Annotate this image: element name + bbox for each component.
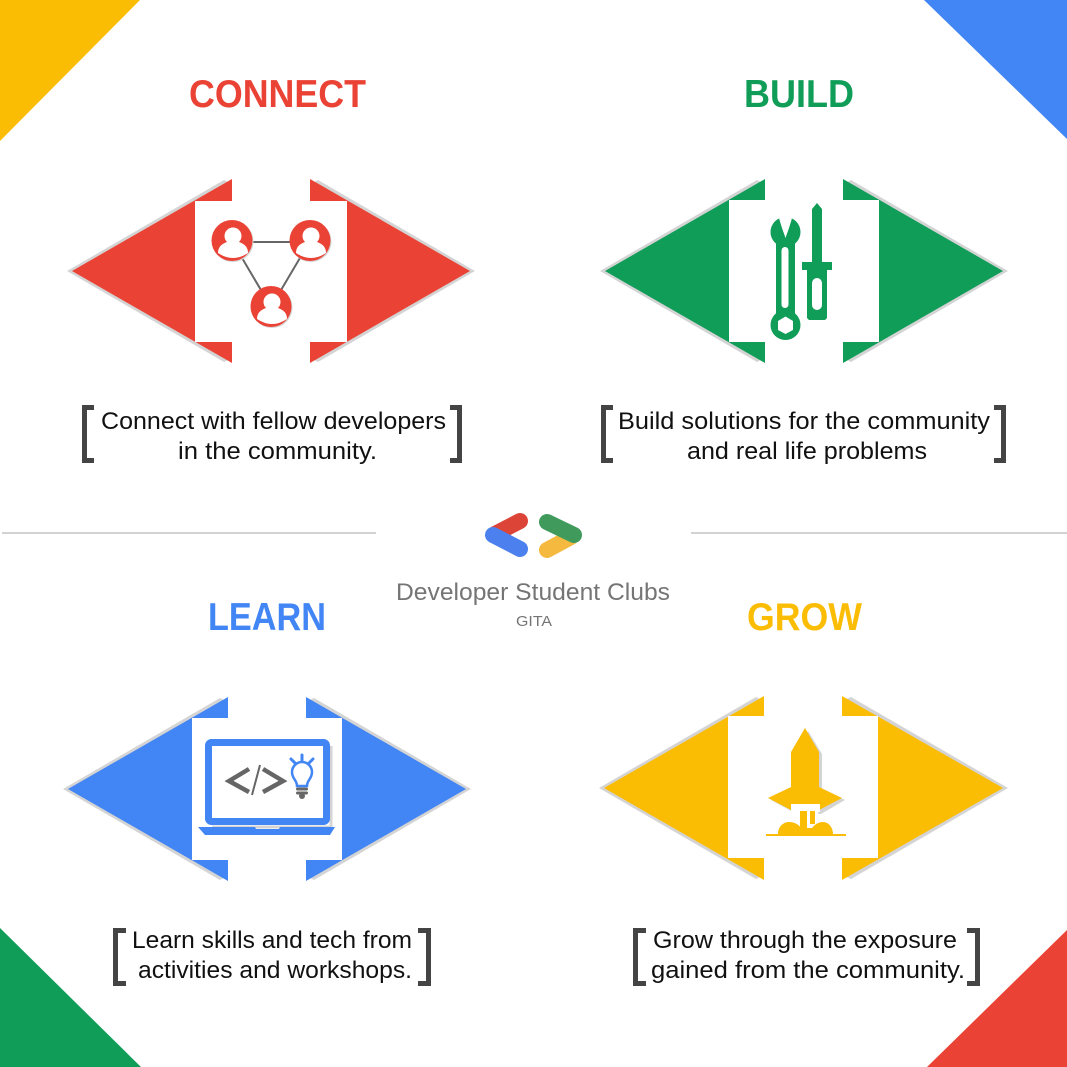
panel: connect	[67, 73, 475, 465]
corner: blue	[924, 0, 1067, 139]
diamond: learn	[63, 697, 471, 881]
icon: wrench and screwdriver	[770, 203, 832, 340]
logo: developer student clubs	[396, 521, 670, 630]
text block: grow: Grow through the exposure	[653, 927, 957, 954]
text block: build	[604, 408, 1004, 465]
diamond: build	[600, 179, 1008, 363]
logo mark	[493, 521, 574, 550]
heading: connect: CONNECT	[189, 73, 366, 116]
text block: connect: Connect with fellow developers	[101, 408, 446, 435]
text block: build: Build solutions for the community	[618, 408, 990, 435]
heading: build: BUILD	[744, 73, 854, 116]
diamond: grow	[599, 696, 1008, 880]
text block: grow: gained from the community.	[651, 957, 965, 984]
text block: connect: in the community.	[178, 438, 377, 465]
text block: learn: activities and workshops.	[138, 957, 412, 984]
text block: grow	[636, 927, 978, 984]
panel: grow	[599, 596, 1008, 984]
text block: build: and real life problems	[687, 438, 927, 465]
heading: learn: LEARN	[208, 596, 326, 639]
panel: build	[600, 73, 1008, 465]
text block: learn: Learn skills and tech from	[132, 927, 412, 954]
heading: grow: GROW	[747, 596, 862, 639]
icon: rocket	[766, 728, 846, 836]
logo chapter name: GITA	[516, 613, 552, 630]
diamond: connect	[67, 179, 475, 363]
corner: green	[0, 928, 141, 1067]
icon: laptop with code and bulb	[198, 742, 335, 835]
text block: connect	[84, 408, 460, 465]
corner: red	[927, 930, 1067, 1067]
icon: connected people	[212, 220, 332, 328]
text block: learn	[116, 927, 428, 984]
logo wordmark: Developer Student Clubs	[396, 579, 670, 606]
corner: yellow	[0, 0, 140, 141]
panel: learn	[63, 596, 471, 984]
